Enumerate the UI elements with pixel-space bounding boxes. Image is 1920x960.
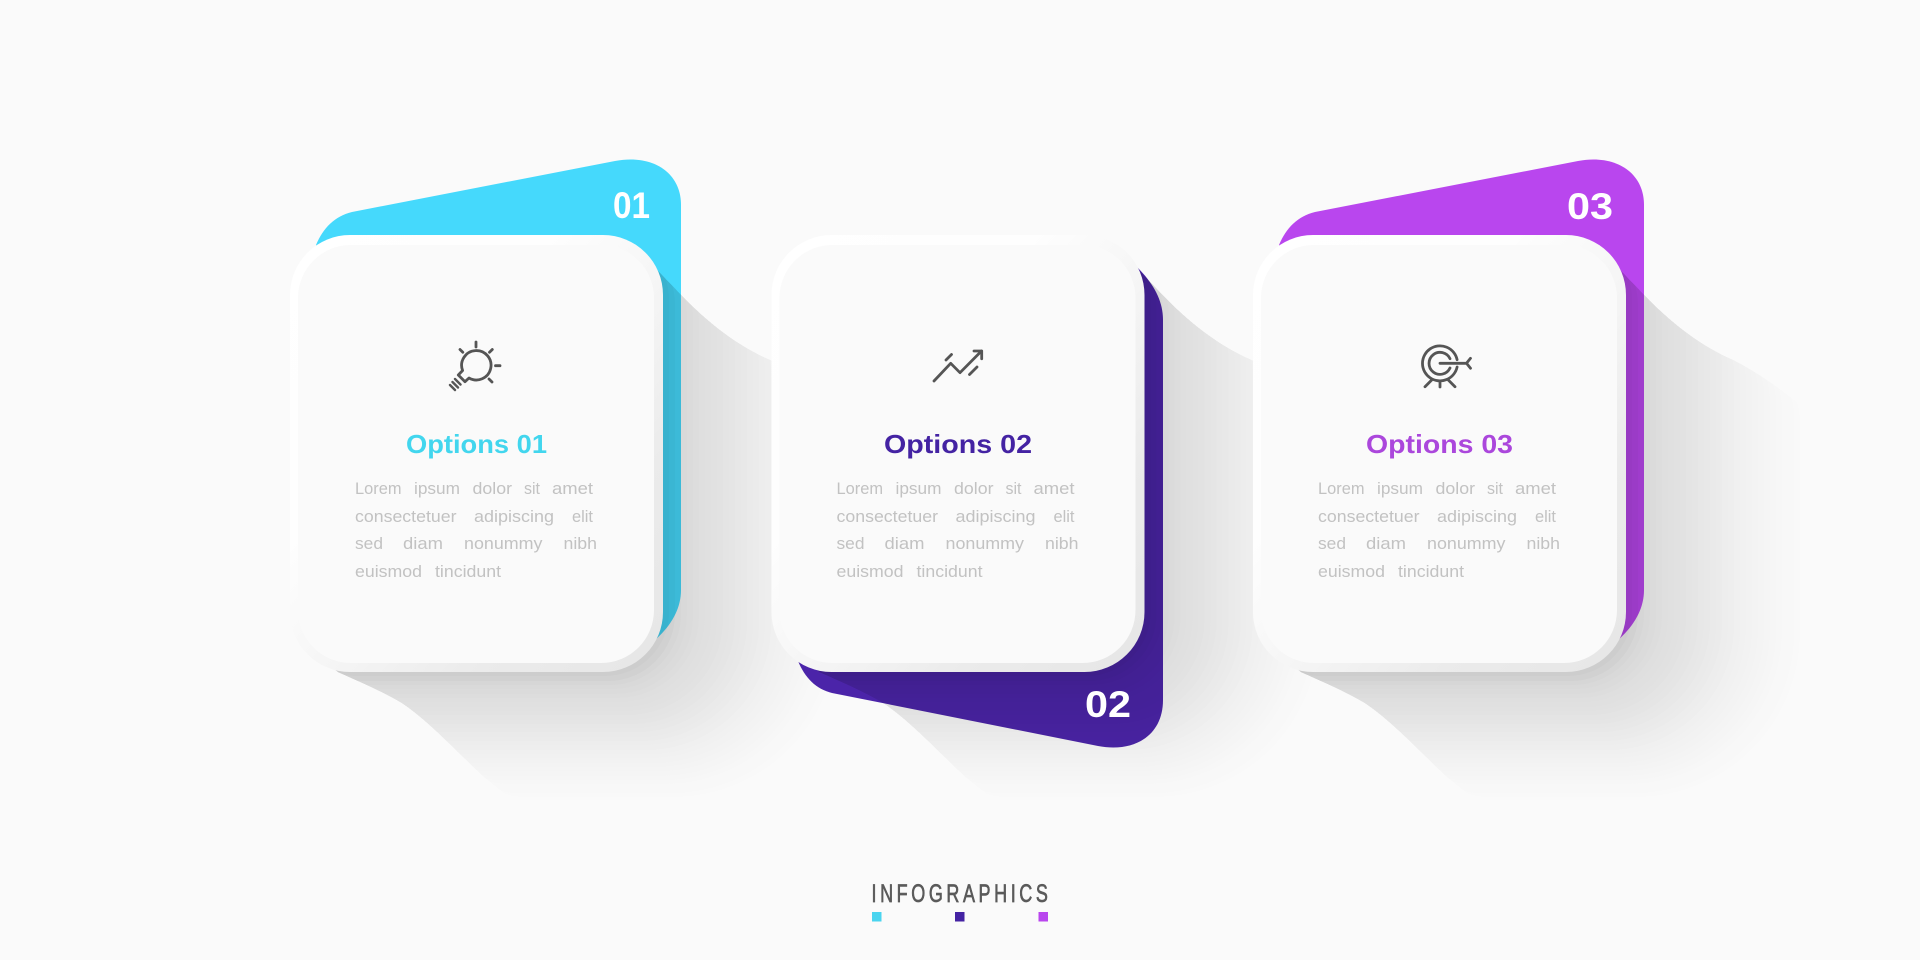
text block: option 01 description: amet bbox=[552, 480, 593, 498]
text block: option 01 description: ipsum bbox=[414, 480, 460, 498]
text block: option 02 description: ipsum bbox=[896, 480, 942, 498]
card: option 01 bbox=[290, 235, 663, 672]
text block: option 02 description: adipiscing bbox=[956, 508, 1036, 526]
number: 01: 01 bbox=[613, 185, 650, 226]
panel: option 01 bbox=[290, 160, 843, 802]
text block: option 03 description: nonummy bbox=[1427, 535, 1506, 553]
text block: option 02 description: tincidunt bbox=[916, 563, 983, 581]
text block: option 01 description: nibh bbox=[564, 535, 597, 553]
number: 03: 03 bbox=[1567, 186, 1613, 227]
legend: colour squares bbox=[872, 912, 1048, 922]
text block: option 02 description: consectetuer bbox=[836, 508, 939, 526]
text block: option 02 description: elit bbox=[1054, 508, 1075, 526]
tab: option 03 purple bbox=[1279, 160, 1644, 640]
text block: option 03 description: diam bbox=[1366, 535, 1406, 553]
text block: option 03 description: ipsum bbox=[1377, 480, 1423, 498]
icon: target with arrow bbox=[1422, 346, 1470, 387]
tab: option 01 cyan bbox=[316, 160, 681, 640]
text block: option 03 description: dolor bbox=[1436, 480, 1476, 498]
heading: Options 01: Options 01 bbox=[406, 429, 547, 459]
text block: option 02 description bbox=[836, 480, 1078, 581]
icon: rising arrow bbox=[934, 351, 982, 381]
text block: option 01 description: tincidunt bbox=[435, 563, 501, 581]
text block: option 01 description: adipiscing bbox=[474, 508, 554, 526]
text block: option 03 description: sed bbox=[1318, 535, 1346, 553]
card: option 02 bbox=[772, 235, 1144, 672]
card: option 03 bbox=[1253, 235, 1626, 672]
text block: option 01 description: diam bbox=[403, 535, 443, 553]
text block: option 03 description: elit bbox=[1535, 508, 1556, 526]
text block: option 02 description: sit bbox=[1006, 480, 1022, 498]
text block: option 03 description: consectetuer bbox=[1318, 508, 1420, 526]
panel: option 03 bbox=[1253, 160, 1806, 802]
text block: option 01 description: sit bbox=[524, 480, 540, 498]
number: 02: 02 bbox=[1085, 684, 1131, 725]
text block: option 03 description: sit bbox=[1487, 480, 1503, 498]
panel: option 02 bbox=[772, 235, 1324, 802]
text block: option 03 description: tincidunt bbox=[1398, 563, 1464, 581]
long shadow: option 03 bbox=[1253, 235, 1806, 802]
text block: option 03 description: euismod bbox=[1318, 563, 1385, 581]
text block: option 03 description: Lorem bbox=[1318, 480, 1364, 498]
text block: option 01 description: euismod bbox=[355, 563, 422, 581]
text block: option 01 description: Lorem bbox=[355, 480, 402, 498]
icon: light bulb bbox=[450, 342, 500, 390]
text block: option 02 description: sed bbox=[836, 535, 864, 553]
text block: option 03 description bbox=[1318, 480, 1560, 581]
tab: option 02 indigo bbox=[798, 267, 1163, 747]
text block: option 01 description: sed bbox=[355, 535, 383, 553]
text block: option 02 description: euismod bbox=[836, 563, 904, 581]
text block: option 03 description: nibh bbox=[1526, 535, 1560, 553]
long shadow: option 01 bbox=[290, 235, 843, 802]
text block: option 03 description: adipiscing bbox=[1437, 508, 1517, 526]
text block: option 02 description: nibh bbox=[1045, 535, 1078, 553]
text block: option 01 description: nonummy bbox=[464, 535, 543, 553]
heading: Options 03: Options 03 bbox=[1366, 429, 1513, 459]
text block: option 03 description: amet bbox=[1515, 480, 1556, 498]
text block: option 01 description: consectetuer bbox=[355, 508, 457, 526]
long shadow: option 02 bbox=[772, 235, 1324, 802]
text block: option 01 description: dolor bbox=[472, 480, 513, 498]
text block: option 02 description: nonummy bbox=[946, 535, 1025, 553]
text block: option 02 description: dolor bbox=[954, 480, 994, 498]
text block: option 01 description: elit bbox=[572, 508, 593, 526]
text block: option 02 description: diam bbox=[884, 535, 924, 553]
text block: option 02 description: amet bbox=[1034, 480, 1075, 498]
heading: Options 02: Options 02 bbox=[884, 429, 1032, 459]
text block: option 02 description: Lorem bbox=[836, 480, 883, 498]
footer: INFOGRAPHICS title: INFOGRAPHICS bbox=[872, 879, 1048, 908]
text block: option 01 description bbox=[355, 480, 597, 581]
